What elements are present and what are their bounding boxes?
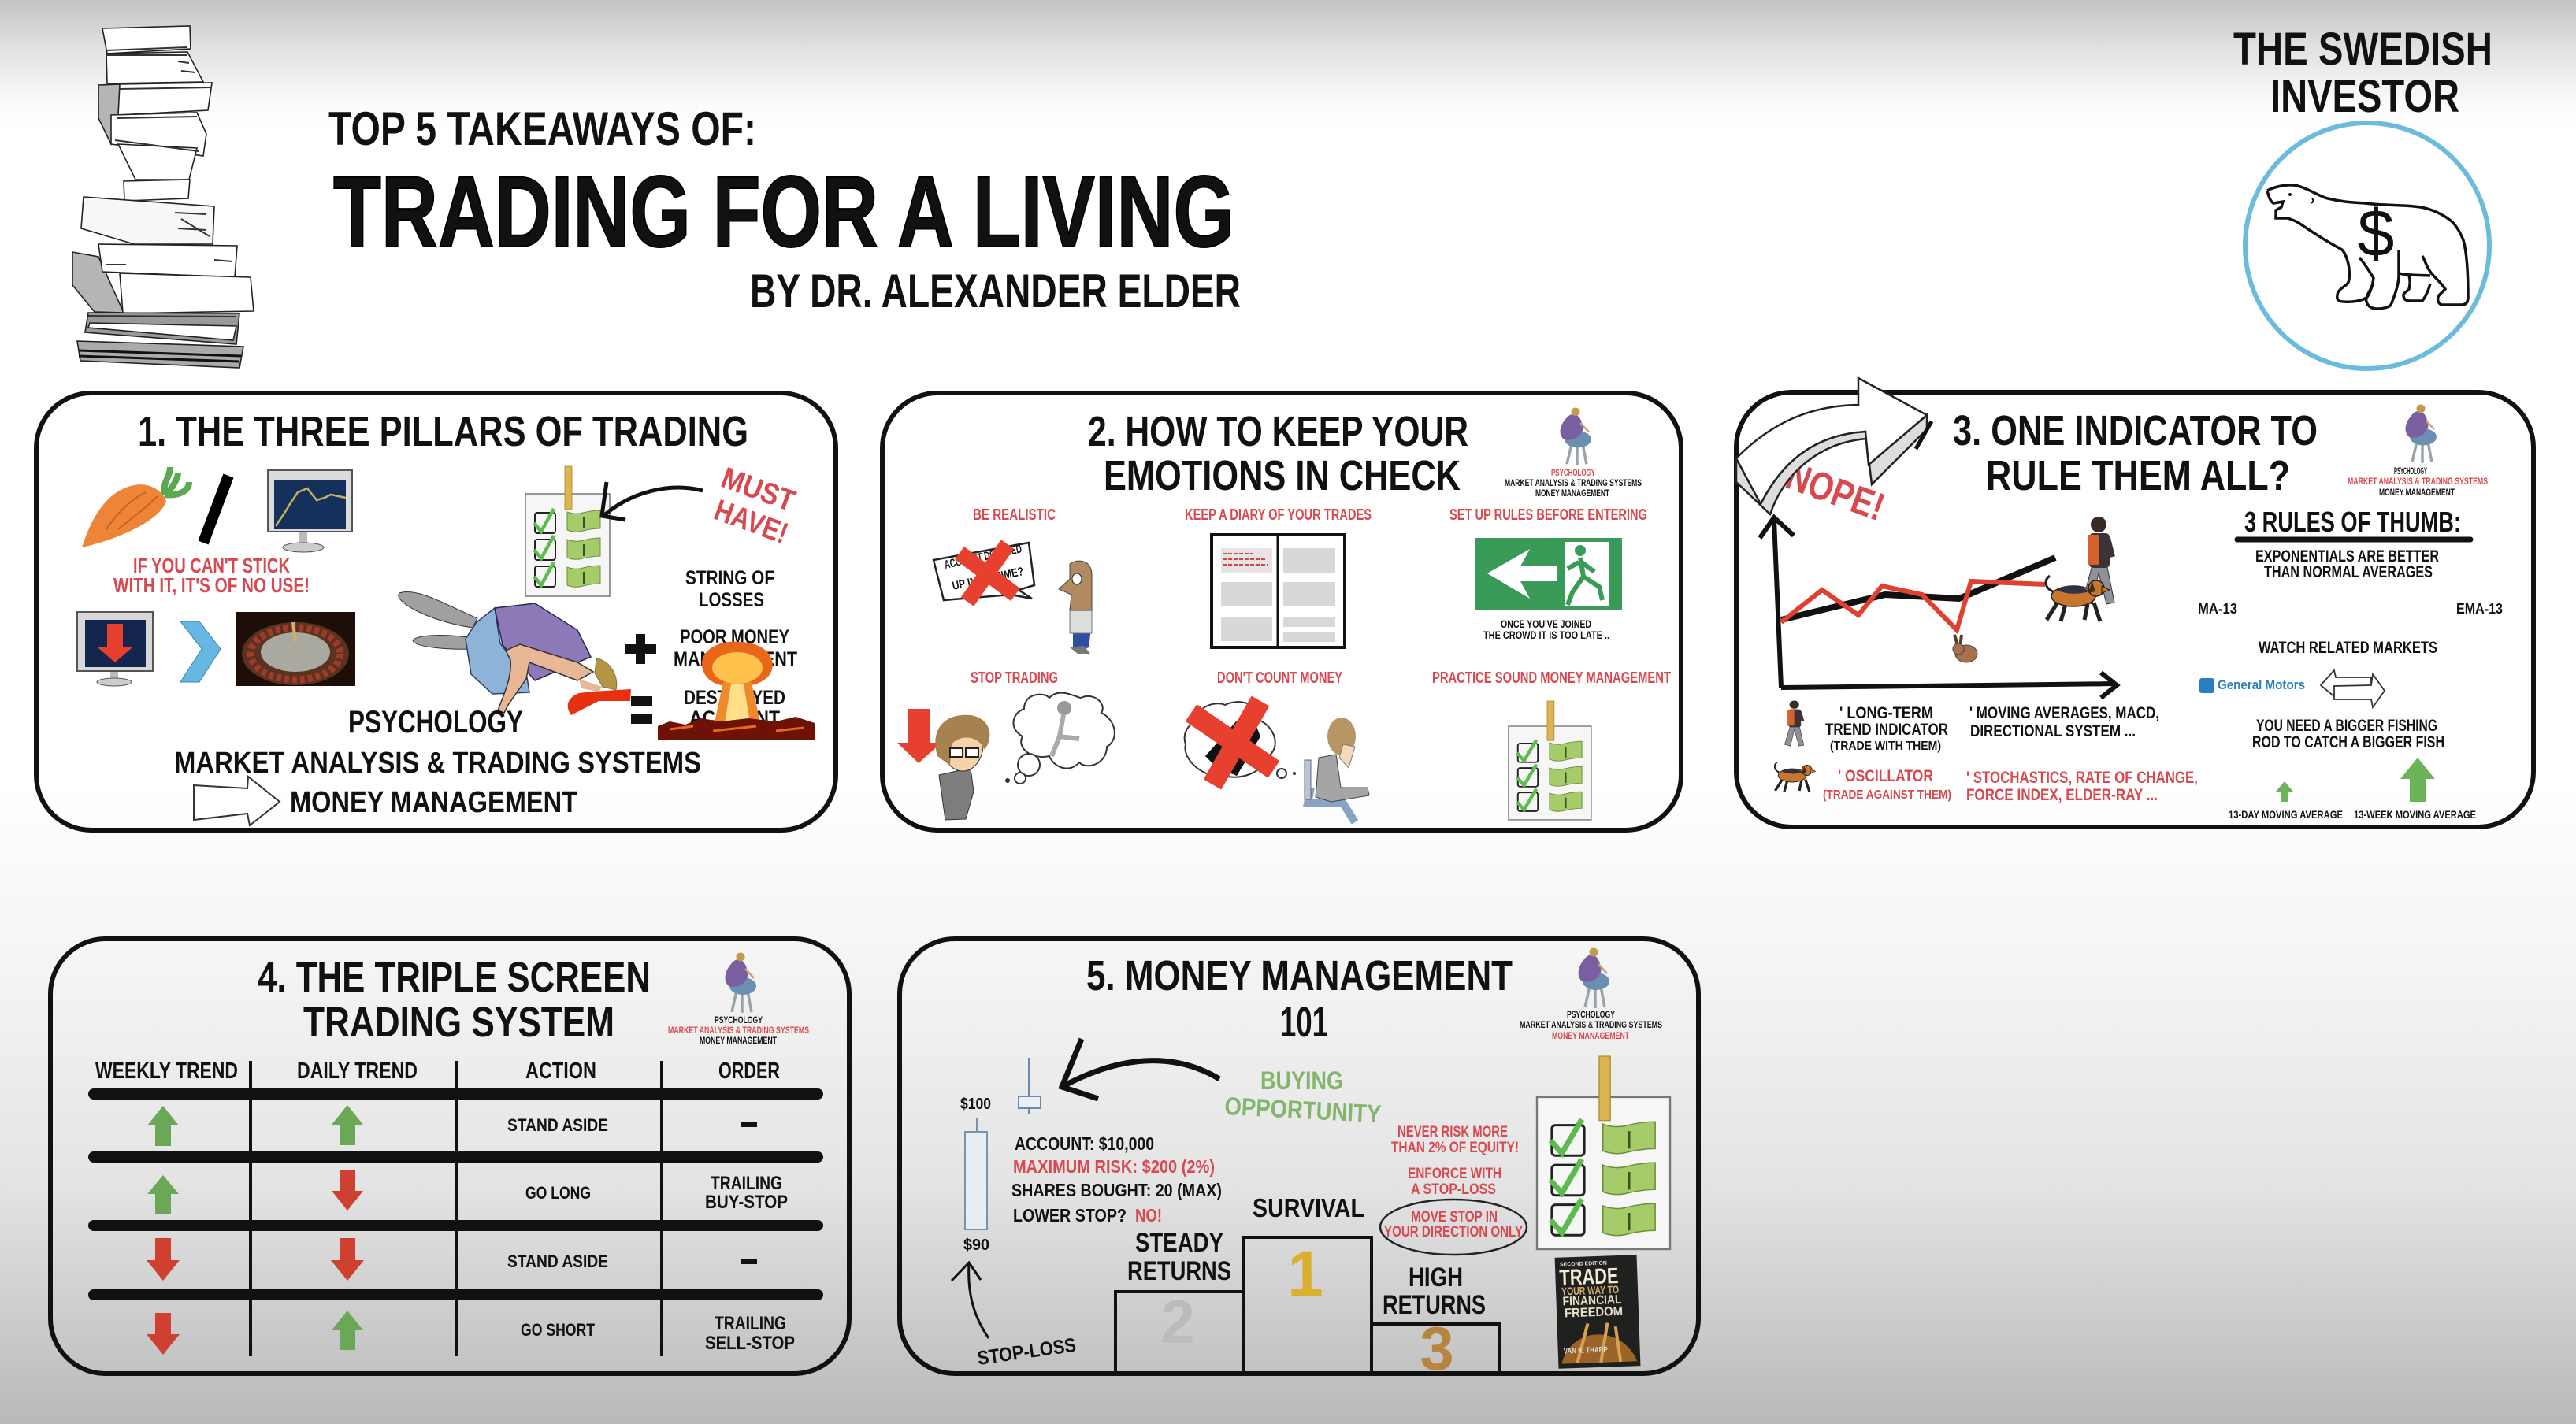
label: ma-13: MA-13 — [2198, 601, 2237, 617]
label: high returns — [1383, 1263, 1486, 1320]
title: trading for a living: TRADING FOR A LIVING — [333, 156, 1234, 269]
logo: general motors: General Motors — [2218, 677, 2305, 692]
text: risk rules: NEVER RISK MORE — [1397, 1124, 1508, 1140]
label: buying opportunity — [1224, 1066, 1382, 1128]
order: none — [741, 1259, 757, 1264]
text: once you've joined — [1483, 617, 1609, 641]
mini labels: pillars: PSYCHOLOGY — [1551, 467, 1595, 478]
text: oscillators list: FORCE INDEX, ELDER-RAY ... — [1966, 786, 2158, 804]
text: oscillator: ' OSCILLATOR — [1838, 767, 1933, 785]
callout: move stop — [1380, 1200, 1527, 1255]
arrow: large curved arrow — [1736, 378, 1932, 514]
text: risk rules — [1391, 1124, 1519, 1198]
icon: trading diary — [1212, 535, 1345, 647]
label: ema-13: EMA-13 — [2456, 601, 2503, 617]
panel: the triple screen trading system — [50, 939, 849, 1374]
label: steady returns — [1127, 1228, 1231, 1286]
label: stop trading: STOP TRADING — [971, 669, 1058, 687]
icon: money-management checklist — [1509, 701, 1591, 820]
text: risk rules: A STOP-LOSS — [1411, 1181, 1496, 1198]
text: account example: MAXIMUM RISK: $200 (2%) — [1013, 1156, 1215, 1177]
icon: nuclear explosion — [658, 642, 815, 740]
header: action: ACTION — [525, 1059, 596, 1084]
heading: panel 5 — [1086, 952, 1513, 1046]
label: stop-loss: STOP-LOSS — [976, 1334, 1078, 1370]
heading: top 5 takeaways: TOP 5 TAKEAWAYS OF: — [328, 102, 756, 155]
label: must have: HAVE! — [710, 494, 792, 551]
text: rule one: THAN NORMAL AVERAGES — [2264, 563, 2433, 581]
illustration: worried man — [935, 715, 989, 820]
icon: thought cloud with trader — [1005, 693, 1115, 784]
text: destroyed account: ACCOUNT — [689, 707, 780, 729]
panel: how to keep your emotions in check — [882, 393, 1681, 830]
arrow: to checklist — [602, 482, 703, 520]
order: trailing sell-stop — [705, 1313, 795, 1354]
text: bigger fishing rod — [2252, 717, 2444, 751]
label: high returns: RETURNS — [1383, 1290, 1486, 1320]
label: must have — [710, 462, 800, 551]
label: don't count money: DON'T COUNT MONEY — [1217, 669, 1342, 687]
order: none — [741, 1122, 757, 1127]
text: rule one — [2255, 547, 2439, 581]
arrow: stop-loss — [952, 1263, 989, 1338]
text: money management: MONEY MANAGEMENT — [290, 786, 577, 819]
arrow: pointing to money management — [194, 777, 280, 825]
text: string of losses: LOSSES — [699, 589, 764, 611]
icon: book cover: FREEDOM — [1565, 1305, 1623, 1320]
text: trend indicators list: DIRECTIONAL SYSTEM ... — [1970, 722, 2136, 740]
heading: panel 2: 2. HOW TO KEEP YOUR — [1088, 408, 1468, 455]
header: daily trend: DAILY TREND — [297, 1059, 418, 1084]
order: trailing buy-stop: BUY-STOP — [705, 1192, 788, 1213]
label: buying opportunity: OPPORTUNITY — [1224, 1092, 1382, 1128]
text: long-term trend indicator: TREND INDICATOR — [1825, 721, 1948, 739]
chart: podium: 2 — [1160, 1287, 1195, 1356]
icon: small candlestick — [1019, 1058, 1041, 1114]
icon: book cover: SECOND EDITION — [1560, 1261, 1607, 1268]
label: steady returns: RETURNS — [1127, 1256, 1231, 1286]
mini labels: pillars — [1520, 1009, 1662, 1041]
label: steady returns: STEADY — [1135, 1228, 1223, 1258]
channel name: THE SWEDISH — [2233, 24, 2492, 75]
icon: crossed speech bubble: UP IN NO TIME? — [951, 565, 1025, 593]
text: account example: ACCOUNT: $10,000 — [1015, 1133, 1154, 1154]
illustration: person in despair — [399, 591, 631, 715]
label: survival: SURVIVAL — [1253, 1193, 1364, 1222]
icon: tall candlestick — [965, 1118, 987, 1229]
heading: panel 3: 3. ONE INDICATOR TO — [1953, 407, 2318, 454]
action: stand aside: STAND ASIDE — [507, 1115, 608, 1135]
text: rule one: EXPONENTIALS ARE BETTER — [2255, 547, 2439, 566]
text: string of losses: STRING OF — [685, 567, 774, 589]
icon: pillars person — [726, 953, 756, 1013]
order: trailing buy-stop: TRAILING — [711, 1173, 782, 1194]
text: long-term trend indicator: ' LONG-TERM — [1839, 704, 1933, 722]
mini labels: pillars: MARKET ANALYSIS & TRADING SYSTEMS — [1520, 1019, 1662, 1030]
mini labels: pillars: MONEY MANAGEMENT — [1535, 488, 1609, 499]
mini labels: pillars — [1505, 467, 1642, 499]
text: risk rules: THAN 2% OF EQUITY! — [1391, 1140, 1519, 1156]
text: long-term trend indicator: (TRADE WITH THEM) — [1830, 740, 1941, 753]
header: weekly trend: WEEKLY TREND — [95, 1059, 238, 1084]
text: watch related markets: WATCH RELATED MARKETS — [2259, 639, 2437, 657]
row 2 arrows — [147, 1170, 363, 1214]
text: market analysis and trading systems: MARKET ANALYSIS & TRADING SYSTEMS — [174, 747, 701, 780]
icon: small dog — [1775, 762, 1816, 792]
heading: panel 4 — [258, 954, 651, 1046]
icon: plus — [625, 634, 656, 664]
icon: monitor with chart — [268, 470, 352, 552]
order: trailing buy-stop — [705, 1173, 788, 1213]
panel: one indicator to rule them all — [1736, 378, 2533, 827]
icon: exit sign — [1475, 538, 1622, 610]
icon: carrot — [82, 467, 189, 547]
illustration: woman at keyboard — [1305, 718, 1369, 822]
icon: book cover: VAN K. THARP — [1564, 1346, 1608, 1356]
chart: podium — [1115, 1237, 1499, 1383]
mini labels: pillars: MARKET ANALYSIS & TRADING SYSTEMS — [2348, 476, 2488, 487]
icon: polar bear logo — [2245, 123, 2489, 369]
text: bigger fishing rod: YOU NEED A BIGGER FISHING — [2256, 717, 2437, 735]
action: go long: GO LONG — [525, 1183, 591, 1203]
icon: monitor with red arrow — [77, 612, 153, 686]
icon: blue chevron — [180, 621, 221, 682]
arrow: to small candle — [1060, 1039, 1219, 1099]
icon: stack of books — [72, 26, 254, 368]
chart: podium: 3 — [1420, 1314, 1454, 1383]
illustration: standing man — [1059, 561, 1092, 654]
label: 13-week moving average: 13-WEEK MOVING AVERAGE — [2354, 808, 2476, 821]
line chart: trend and oscillator — [1760, 517, 2117, 698]
icon: book cover — [1555, 1255, 1640, 1369]
order: trailing sell-stop: SELL-STOP — [705, 1333, 795, 1354]
text: poor money management: MANAGEMENT — [674, 648, 797, 670]
order: trailing sell-stop: TRAILING — [715, 1313, 786, 1334]
mini labels: pillars: MONEY MANAGEMENT — [1552, 1030, 1629, 1041]
icon: money-management checklist — [1537, 1056, 1670, 1249]
text: string of losses — [685, 567, 774, 611]
label: must have: MUST — [717, 462, 800, 518]
header: order: ORDER — [718, 1059, 780, 1084]
row 4 arrows — [147, 1311, 363, 1355]
heading: panel 2 — [1088, 408, 1468, 499]
channel name — [2233, 24, 2492, 122]
text: bigger fishing rod: ROD TO CATCH A BIGGER FISH — [2252, 733, 2444, 751]
text: account example: SHARES BOUGHT: 20 (MAX) — [1011, 1180, 1222, 1200]
text: destroyed account — [684, 687, 785, 729]
row 3 arrows — [147, 1238, 364, 1281]
mini labels: pillars: MARKET ANALYSIS & TRADING SYSTEMS — [668, 1025, 809, 1036]
illustration: man walking — [2083, 517, 2114, 604]
arrow: red down — [897, 709, 941, 763]
channel name: INVESTOR — [2270, 71, 2459, 122]
icon: pillars person — [2406, 405, 2437, 463]
label: set up rules: SET UP RULES BEFORE ENTERING — [1449, 506, 1647, 524]
label: 13-day moving average: 13-DAY MOVING AVERAGE — [2229, 808, 2343, 821]
mini labels: pillars: PSYCHOLOGY — [715, 1014, 763, 1025]
text: once you've joined: THE CROWD IT IS TOO LATE .. — [1483, 629, 1609, 641]
icon: double arrow — [2321, 670, 2385, 707]
illustration: rabbit — [1953, 635, 1977, 662]
text: psychology: PSYCHOLOGY — [348, 705, 523, 740]
illustration: dog — [2046, 576, 2110, 621]
text: stick with it: WITH IT, IT'S OF NO USE! — [113, 573, 310, 597]
mini labels: pillars: MONEY MANAGEMENT — [700, 1035, 777, 1046]
text: oscillators list — [1966, 769, 2198, 804]
text: account example — [1011, 1133, 1222, 1226]
text: risk rules: ENFORCE WITH — [1408, 1166, 1501, 1182]
mini labels: pillars: MARKET ANALYSIS & TRADING SYSTEMS — [1505, 477, 1642, 488]
callout: move stop: YOUR DIRECTION ONLY — [1384, 1224, 1523, 1240]
icon: book cover: FINANCIAL — [1562, 1293, 1622, 1309]
text: oscillator — [1823, 767, 1951, 802]
text: account example: LOWER STOP? — [1013, 1205, 1127, 1226]
table: trading system grid — [94, 1061, 818, 1356]
panel: money management 101 — [900, 939, 1698, 1383]
icon: polar bear logo: $ — [2358, 196, 2394, 270]
icon: book cover: TRADE — [1559, 1263, 1619, 1290]
label: practice sound money management: PRACTICE SOUND MONEY MANAGEMENT — [1432, 669, 1671, 687]
label: nope: NOPE! — [1780, 454, 1891, 529]
label: buying opportunity: BUYING — [1260, 1066, 1343, 1095]
heading: panel 4: 4. THE TRIPLE SCREEN — [258, 954, 651, 1001]
heading: panel 3: RULE THEM ALL? — [1986, 452, 2290, 499]
icon: pillars person — [1579, 948, 1609, 1008]
action: go short: GO SHORT — [521, 1320, 595, 1340]
heading: 3 rules of thumb: 3 RULES OF THUMB: — [2244, 506, 2461, 538]
heading: panel 2: EMOTIONS IN CHECK — [1104, 452, 1461, 499]
row 1 arrows — [147, 1105, 363, 1146]
text: long-term trend indicator — [1825, 704, 1948, 753]
icon: slash — [203, 476, 228, 543]
text: stick with it: IF YOU CAN'T STICK — [133, 554, 290, 577]
callout: move stop: MOVE STOP IN — [1411, 1209, 1498, 1226]
mini labels: pillars: PSYCHOLOGY — [1567, 1009, 1615, 1020]
text: once you've joined: ONCE YOU'VE JOINED — [1501, 617, 1591, 630]
label: $90: $90 — [963, 1237, 989, 1254]
text: account example: NO! — [1135, 1205, 1162, 1226]
panel: the three pillars of trading — [36, 393, 836, 830]
icon: crossed money thought — [1185, 701, 1296, 784]
icon: money-management checklist — [525, 466, 610, 596]
text: oscillator: (TRADE AGAINST THEM) — [1823, 788, 1951, 802]
icon: book cover: YOUR WAY TO — [1561, 1283, 1619, 1298]
chart: podium: 1 — [1287, 1238, 1323, 1310]
text: oscillators list: ' STOCHASTICS, RATE OF CHANGE, — [1966, 769, 2198, 787]
heading: panel 3 — [1953, 407, 2318, 499]
action: stand aside: STAND ASIDE — [507, 1252, 608, 1271]
heading: panel 1: 1. THE THREE PILLARS OF TRADING — [138, 408, 748, 455]
text: destroyed account: DESTROYED — [684, 687, 785, 709]
text: stick with it — [113, 554, 310, 597]
icon: small green arrow — [2276, 781, 2293, 802]
icon: crossed speech bubble — [934, 542, 1034, 602]
label: be realistic: BE REALISTIC — [973, 506, 1056, 524]
icon: roulette wheel — [236, 612, 355, 686]
text: trend indicators list: ' MOVING AVERAGES, MACD, — [1969, 704, 2159, 722]
label: keep a diary: KEEP A DIARY OF YOUR TRADES — [1185, 506, 1372, 524]
icon: small walker — [1784, 701, 1804, 746]
label: $100: $100 — [960, 1096, 991, 1113]
label: high returns: HIGH — [1409, 1263, 1463, 1292]
mini labels: pillars — [2348, 465, 2488, 498]
author: BY DR. ALEXANDER ELDER — [750, 265, 1241, 317]
icon: crossed speech bubble: ACCOUNT DOUBLED — [943, 542, 1023, 572]
mini labels: pillars — [668, 1014, 809, 1046]
heading: panel 5: 101 — [1280, 999, 1328, 1046]
mini labels: pillars: MONEY MANAGEMENT — [2379, 487, 2455, 498]
icon: equals — [631, 701, 652, 719]
text: poor money management: POOR MONEY — [680, 626, 789, 648]
heading: panel 5: 5. MONEY MANAGEMENT — [1086, 952, 1513, 999]
icon: pillars person — [1561, 408, 1591, 465]
text: trend indicators list — [1969, 704, 2159, 740]
text: poor money management — [674, 626, 797, 670]
heading: panel 4: TRADING SYSTEM — [303, 999, 614, 1046]
mini labels: pillars: PSYCHOLOGY — [2394, 465, 2427, 477]
icon: large green arrow — [2400, 758, 2435, 802]
